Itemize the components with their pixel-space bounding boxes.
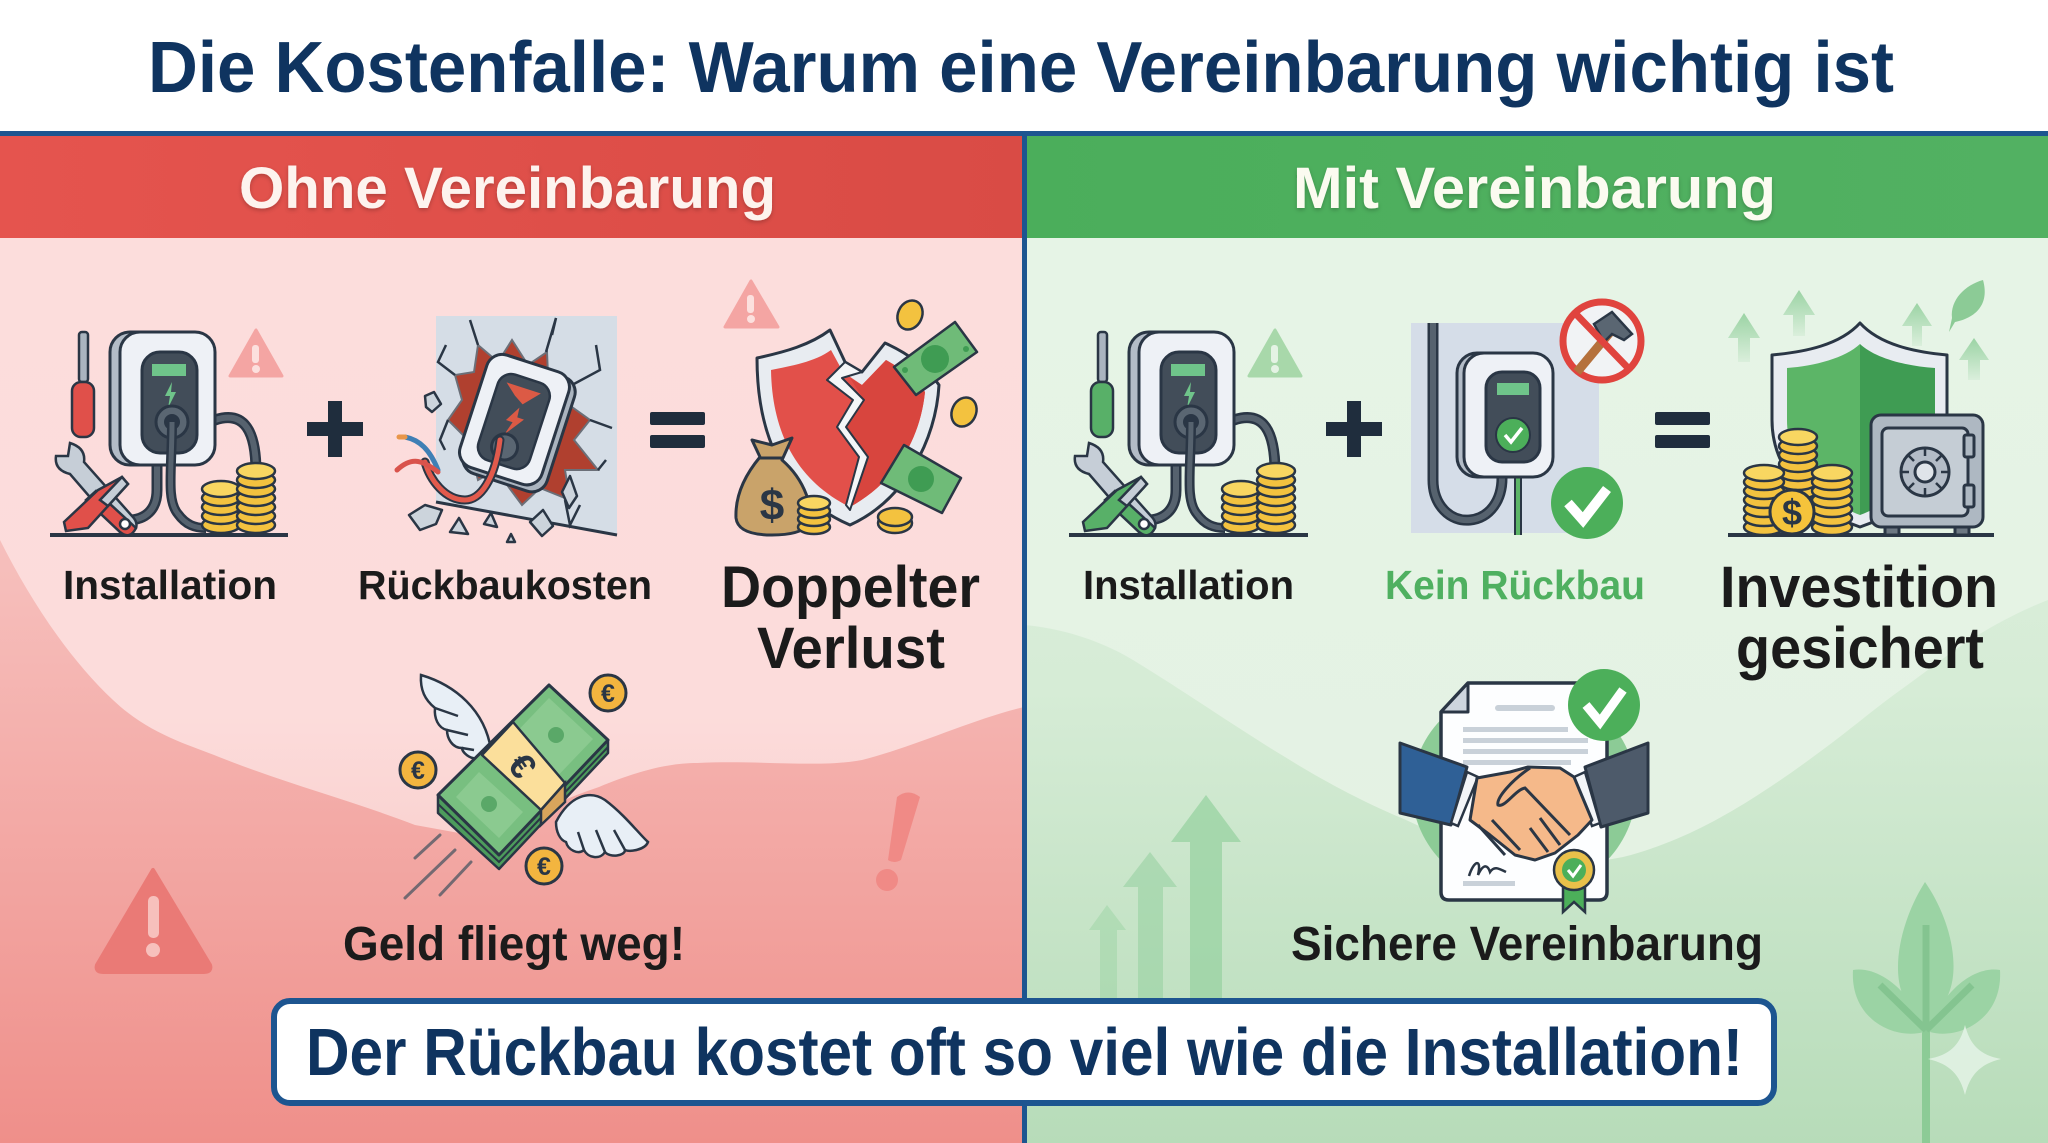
- money bag: [736, 438, 810, 535]
- icon: flying money: €: [500, 746, 545, 786]
- header green: [1027, 136, 2048, 238]
- title: Die Kostenfalle: Warum eine Vereinbarung wichtig ist: [148, 28, 1894, 108]
- bundle bottom layers: [438, 740, 608, 869]
- icon: warning triangle background: [97, 870, 210, 972]
- floor line: [1728, 533, 1994, 537]
- signature: [1469, 863, 1506, 876]
- icon: charger installation red: [50, 330, 288, 537]
- seal: [1554, 850, 1594, 912]
- sparkle: [1928, 1025, 2001, 1095]
- screwdriver: [1091, 332, 1113, 437]
- panel: ohne Vereinbarung: [0, 133, 1024, 1143]
- label: Installation: Installation: [1083, 562, 1294, 608]
- center divider: [1022, 133, 1027, 1143]
- heading: Mit Vereinbarung: Mit Vereinbarung: [1293, 156, 1776, 221]
- equals sign: [1655, 412, 1710, 448]
- background plant: [1853, 882, 2001, 1143]
- upper wing: [421, 675, 491, 758]
- heading: Ohne Vereinbarung: Ohne Vereinbarung: [239, 156, 776, 221]
- panel background green: [1024, 133, 2048, 1143]
- icon: secured investment: [1728, 280, 1994, 537]
- safe: [1871, 415, 1983, 535]
- icon: broken shield with money: [725, 281, 981, 535]
- icon: exclamation mark background: [876, 792, 920, 891]
- coin stacks: [202, 463, 275, 533]
- title band: [0, 0, 2048, 133]
- warning triangle small: [725, 281, 778, 327]
- left sleeve: [1400, 743, 1467, 825]
- callout: [274, 1001, 1774, 1103]
- label: Doppelter Verlust: Doppelter: [721, 555, 980, 620]
- euro coins: €: [537, 853, 551, 881]
- label: Investition gesichert: [1720, 555, 1998, 681]
- coin stacks: [1744, 429, 1852, 535]
- light wave area red: [0, 238, 1024, 835]
- charger body: [1457, 353, 1545, 477]
- wall: [436, 316, 617, 535]
- label: Rückbaukosten: Rückbaukosten: [358, 562, 652, 608]
- cables: [128, 418, 256, 520]
- plus sign: [1326, 401, 1382, 457]
- rising arrows: [1728, 290, 1989, 380]
- check badge: [1568, 669, 1640, 741]
- icon: handshake over contract: [1400, 669, 1648, 912]
- tilted charger: [454, 350, 580, 496]
- halo: [1412, 685, 1636, 895]
- label: Installation: Installation: [63, 562, 277, 608]
- label: Investition gesichert: gesichert: [1736, 616, 1984, 681]
- icon: flying money: [400, 675, 648, 898]
- shield rim: [757, 330, 939, 525]
- panel: mit Vereinbarung: [1024, 133, 2048, 1143]
- wall: [1411, 323, 1599, 533]
- panel background red: [0, 133, 1024, 1143]
- cracks: [438, 318, 612, 525]
- light wave area green: [1024, 238, 2048, 861]
- shield: [1772, 323, 1947, 527]
- floor line: [50, 533, 288, 537]
- label: Investition gesichert: Investition: [1720, 555, 1998, 620]
- charger body: [1129, 332, 1229, 465]
- text lines: [1463, 705, 1588, 886]
- document: [1441, 683, 1607, 900]
- bank note top: [894, 322, 977, 395]
- main cable: [170, 422, 206, 528]
- header red: [0, 136, 1022, 238]
- screwdriver: [72, 332, 94, 437]
- bank note bottom: [881, 445, 961, 513]
- green check: [1551, 467, 1623, 539]
- dollar coin: $: [1782, 492, 1802, 533]
- icon: broken wall with charger: [397, 316, 617, 542]
- background growth arrows: [1089, 795, 1241, 1000]
- warning triangle small: [1249, 330, 1301, 376]
- label: Doppelter Verlust: Verlust: [757, 616, 945, 681]
- floor line: [1069, 533, 1308, 537]
- cables: [1147, 418, 1275, 520]
- charger body: [110, 332, 210, 465]
- coin stacks: [1222, 463, 1295, 533]
- crossed tools: [56, 443, 136, 535]
- label: Kein Rückbau: Kein Rückbau: [1385, 562, 1645, 608]
- crack: [827, 362, 868, 510]
- speed lines: [405, 835, 471, 898]
- coins flying: [878, 296, 981, 533]
- right sleeve: [1585, 743, 1648, 827]
- callout box: [274, 1001, 1774, 1103]
- green wire: [1514, 475, 1522, 535]
- euro coins: €: [601, 680, 615, 708]
- euro coins: €: [411, 757, 425, 785]
- dollar coin: [1770, 490, 1814, 534]
- paper band: [482, 722, 565, 810]
- equals sign: [650, 412, 705, 448]
- wall cable: [1433, 323, 1502, 520]
- shield red face: [771, 350, 925, 507]
- euro coins: [400, 675, 626, 884]
- floor corner: [436, 502, 617, 535]
- shield darker right: [846, 360, 925, 507]
- small coin stack: [798, 496, 830, 534]
- hands: [1470, 767, 1592, 860]
- icon: intact wall charger: [1411, 302, 1641, 539]
- crossed tools: [1075, 443, 1156, 535]
- no hammer sign: [1563, 302, 1641, 380]
- warning triangle small: [230, 330, 282, 376]
- leaf: [1949, 280, 1985, 332]
- label: Sichere Vereinbarung: Sichere Vereinbarung: [1291, 918, 1763, 971]
- plus sign: [307, 401, 363, 457]
- label: Geld fliegt weg: Geld fliegt weg!: [343, 918, 685, 971]
- bundle top note: [438, 685, 608, 855]
- callout text: Der Rückbau kostet oft so viel wie die Installation!: [306, 1015, 1743, 1090]
- money bag: $: [760, 481, 784, 530]
- torn wires: [397, 437, 500, 500]
- icon: charger installation green: [1069, 330, 1308, 537]
- main cable: [1190, 422, 1225, 528]
- top rule: [0, 131, 2048, 136]
- lower wing: [556, 795, 648, 857]
- rubble: [409, 392, 577, 542]
- hole: [448, 340, 598, 505]
- label: Doppelter Verlust: [721, 555, 980, 681]
